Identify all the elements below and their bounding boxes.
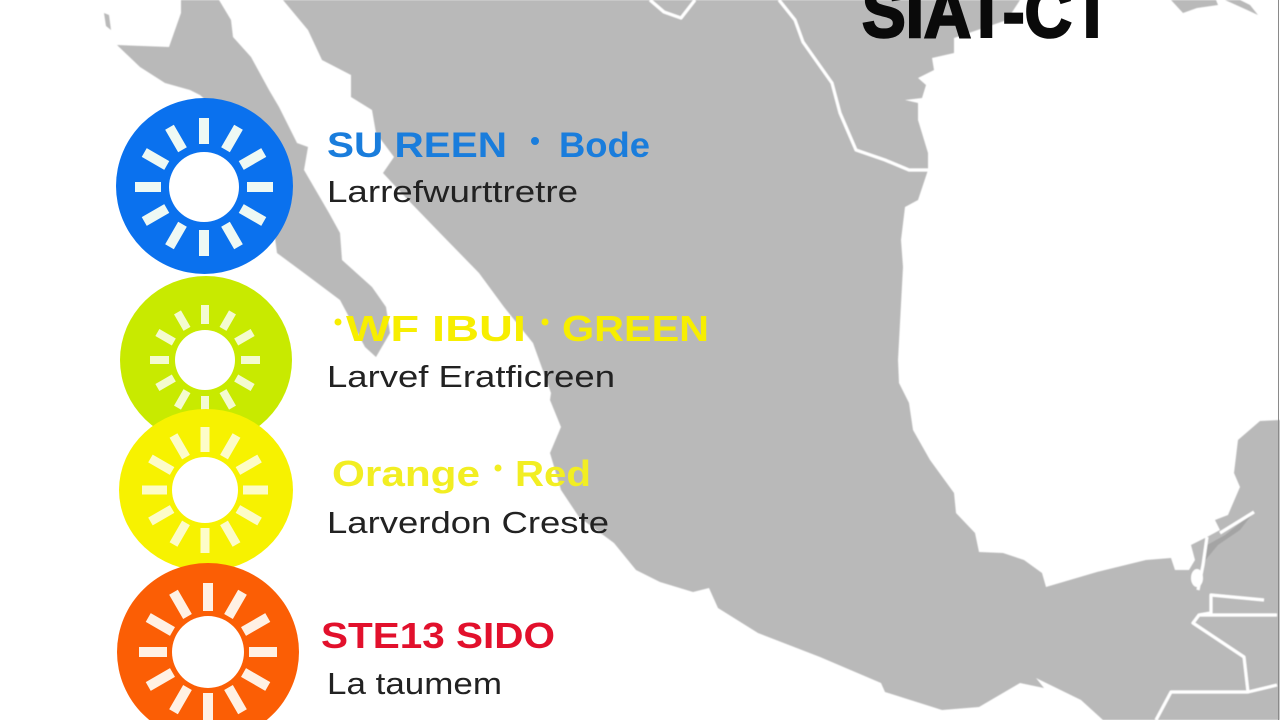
panel: level 4 sun icon (orange) [117,563,299,720]
text block: level 1 heading: Bode [559,126,650,165]
map: mainland [283,0,1280,720]
map: right edge line [1278,0,1279,720]
map: Baja California peninsula [117,0,390,357]
text block: level 3 heading: Red [515,453,591,494]
text block: level 1 heading [327,126,650,165]
panel: level 1 sun icon (blue) [116,98,293,274]
text block: level 2 heading: WF IBUI [346,308,526,349]
text block: level 2 heading [334,308,709,349]
panel: level 3 sun icon (yellow) [119,409,293,571]
map: Yucatan lagoon [1203,512,1254,563]
text block: level 3 heading: Orange [332,453,480,494]
text block: level 4 heading: STE13 SIDO [321,615,555,656]
map: small island [104,13,111,30]
map: border lines [650,0,1277,720]
text block: level 2 description: Larvef Eratficreen [327,359,615,394]
text block: level 1 description: Larrefwurttretre [327,174,578,209]
text block: level 3 heading [332,453,591,494]
text block: level 2 heading: GREEN [562,308,709,349]
panel: level 2 sun icon (lime) [120,276,292,444]
text block: level 1 heading: SU REEN [327,126,507,165]
text block: level 3 description: Larverdon Creste [327,505,609,540]
text block: level 4 description: La taumem [327,666,502,701]
map: top-right land [1171,0,1258,15]
map: coastal lagoon [1191,569,1203,587]
